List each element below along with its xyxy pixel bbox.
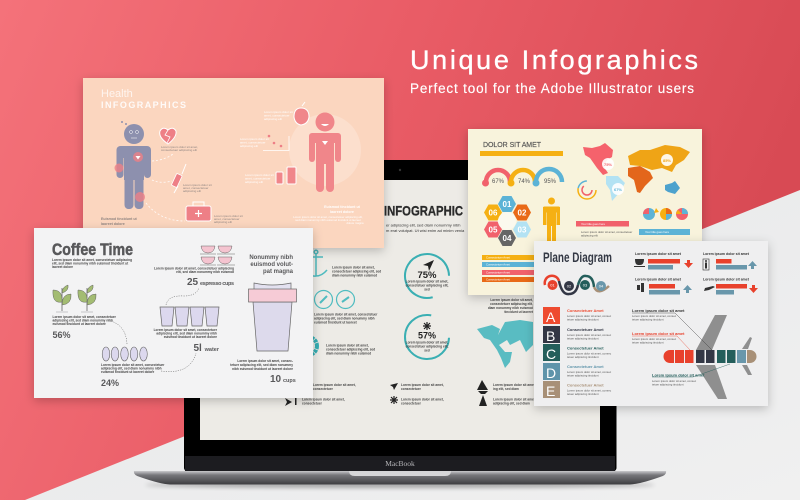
map caption text: adipiscing elit <box>581 234 598 238</box>
laptop bezel <box>184 160 616 471</box>
list text: Lorem ipsum dolor sit amet, consec <box>567 352 612 356</box>
cup text: Lorem ipsum dolor sit amet, consec- <box>237 359 293 363</box>
water text <box>154 328 218 339</box>
icon: drinks <box>276 167 296 184</box>
compass text: Lorem ipsum dolor sit amet, consectetuer <box>314 312 378 316</box>
laptop screen infographic <box>200 180 600 440</box>
camera <box>399 169 401 171</box>
healthy captions: Lorem ipsum dolor sit <box>264 110 293 114</box>
yellow card <box>468 129 702 295</box>
healthy captions: amet, consectetuer <box>264 114 290 118</box>
stat: 10 cups <box>270 374 296 385</box>
healthy summary: Lorem ipsum dolor sit amet, consectetuer adipiscing elit, <box>293 215 363 219</box>
sick captions: adipiscing elit <box>183 189 201 193</box>
gauge 57%: Lorem ipsum dolor sit amet, <box>406 340 448 344</box>
plane leader lines <box>632 313 730 377</box>
lower captions: Lorem ipsum dolor sit amet, <box>313 383 356 387</box>
lower captions: consectetuer <box>313 387 334 391</box>
gauge 57%: sed <box>424 348 430 352</box>
plane callouts: Lorem ipsum dolor sit amet, consec <box>632 337 677 341</box>
hexagon cycle <box>484 196 531 246</box>
anchor text: Lorem ipsum dolor sit amet, <box>332 266 375 270</box>
plane callouts: tetuer adipiscing tincidunt <box>652 382 684 386</box>
halo <box>289 114 361 186</box>
plant text: euismod tincidunt ut laoreet dolore <box>52 322 106 326</box>
eurasia <box>628 145 690 172</box>
plane callouts: Lorem ipsum dolor sit amet, consec <box>632 314 677 318</box>
icon: chart <box>263 135 289 150</box>
coloured list bars: Consectetuer Amet <box>486 262 510 266</box>
panel: plane diagram <box>534 241 768 406</box>
right column text: diam nonummy nibh euismod <box>488 306 533 310</box>
pie charts <box>643 208 688 220</box>
icons row: plane, star, ships <box>285 380 488 406</box>
healthy captions: adipiscing elit <box>240 144 258 148</box>
right column text: consectetuer adipiscing elit, <box>490 302 533 306</box>
letter list: A <box>546 309 556 325</box>
coffee intro <box>52 258 132 269</box>
letter list: D <box>546 365 556 381</box>
plane card <box>534 241 768 406</box>
dashed connectors <box>146 154 185 221</box>
coffee card <box>34 228 313 398</box>
screen intro text: er adipiscing elit, sed diam nonummy nibh <box>386 222 460 228</box>
bezel chin <box>185 456 615 471</box>
large cup heading: pat magna <box>263 269 294 275</box>
heading bar <box>480 151 563 156</box>
espresso text <box>154 266 234 274</box>
coloured list bars: Consectetuer Amet <box>486 256 510 260</box>
right column text: tincidunt ut laoreet <box>504 310 534 314</box>
healthy captions: adipiscing elit <box>245 180 263 184</box>
wave steps <box>545 276 609 294</box>
list text: Lorem ipsum dolor sit amet, consec <box>567 314 612 318</box>
lower captions: Lorem ipsum dolor sit amet, <box>401 383 444 387</box>
healthy summary: Euismod tincidunt ut <box>324 205 361 209</box>
plane callouts: Lorem ipsum dolor sit amet, consec <box>652 379 697 383</box>
coloured list bars: Consectetuer Amet <box>486 270 510 274</box>
africa <box>628 166 653 193</box>
plane callouts: Lorem ipsum dolor sit amet <box>632 308 685 313</box>
icon: espresso cups <box>200 246 235 265</box>
plane callouts: tetuer adipiscing tincidunt <box>632 318 664 322</box>
letter list <box>543 307 560 399</box>
icon: beans <box>102 347 147 361</box>
healthy summary: dolore magna <box>346 221 364 225</box>
list text: tetuer adipiscing tincidunt <box>567 374 599 378</box>
ring text <box>326 344 375 356</box>
north america <box>583 143 613 175</box>
right column text: Lorem ipsum dolor sit amet, <box>490 298 533 302</box>
arc percentages <box>486 169 562 182</box>
water text: Lorem ipsum dolor sit amet, consectetuer <box>154 328 218 332</box>
lower captions: Lorem ipsum dolor sit amet, <box>493 383 536 387</box>
dotted arrows <box>111 288 199 372</box>
wave steps: 03 <box>583 282 588 288</box>
healthy summary: sed diam nonummy nibh euismod tincidunt ut laoreet <box>295 218 361 222</box>
MacBook label: MacBook <box>385 459 415 468</box>
healthy captions: amet, consectetuer <box>240 140 266 144</box>
sick captions: Lorem ipsum dolor sit <box>183 183 212 187</box>
wave steps: 04 <box>599 284 604 288</box>
plane callouts: Lorem ipsum dolor sit amet <box>632 331 685 336</box>
letter list: C <box>546 346 556 362</box>
gauge 75%: sed <box>424 288 430 292</box>
donut chart <box>578 181 596 199</box>
panel: dolor sit amet <box>468 129 702 295</box>
sick figure <box>114 121 151 209</box>
hexagon cycle: 04 <box>503 234 512 243</box>
sick captions: consectetuer adipiscing elit <box>161 148 197 152</box>
map caption bars: Your title goes here <box>645 230 669 234</box>
hexagon cycle: 03 <box>518 226 527 234</box>
screen intro text: m erat volutpat. Ut wisi enim ad minim venia <box>386 228 465 233</box>
list text: tetuer adipiscing tincidunt <box>567 355 599 359</box>
screen intro text <box>386 222 465 233</box>
plane callouts: tetuer adipiscing tincidunt <box>632 340 664 344</box>
large cup heading: euismod volut- <box>250 262 293 268</box>
stat: 10 cups: cups <box>283 378 296 384</box>
icon: anchor <box>304 250 327 276</box>
stat: 5l water: 5l water <box>194 343 220 354</box>
icon: water glasses <box>160 307 219 326</box>
anchor text: diam nonummy nibh euismod <box>332 274 377 278</box>
title: Unique Infographics <box>410 45 698 75</box>
large cup heading <box>249 255 294 275</box>
list text: tetuer adipiscing tincidunt <box>567 318 599 322</box>
hexagon cycle: 01 <box>503 200 512 209</box>
ring text: consectetuer adipiscing elit, sed <box>326 348 375 352</box>
person figure <box>543 198 560 242</box>
gauge 57%: consectetuer adipiscing elit, <box>406 344 449 348</box>
bean text: euismod tincidunt ut laoreet dolore <box>101 370 155 374</box>
australia <box>665 181 680 194</box>
icon: first aid kit <box>186 202 211 221</box>
health heading: INFOGRAPHICS <box>101 100 186 110</box>
plant text <box>52 315 117 326</box>
lower captions: consectetuer <box>401 387 422 391</box>
panel: health infographics <box>83 78 384 248</box>
coffee intro: elit, sed diam nonummy nibh euismod tincidunt ut <box>52 262 129 266</box>
coloured list bars: Consectetuer Amet <box>486 278 510 282</box>
healthy summary <box>293 205 364 225</box>
anchor text <box>332 266 381 278</box>
hexagon cycle: 02 <box>518 208 527 218</box>
south america <box>606 176 625 201</box>
list text: Consectetuer Amet <box>567 382 604 388</box>
gauge 75%: 75% <box>417 270 437 281</box>
list text: tetuer adipiscing tincidunt <box>567 336 599 340</box>
list text: Lorem ipsum dolor sit amet, consec <box>567 370 612 374</box>
arc badges <box>482 180 540 186</box>
wave steps: 01 <box>550 282 555 288</box>
icon: syringe <box>171 164 186 193</box>
plant text: Lorem ipsum dolor sit amet, consectetuer <box>52 315 117 319</box>
anchor text: consectetuer adipiscing elit, sed <box>332 270 381 274</box>
stat rows: Lorem ipsum dolor sit amet <box>635 278 682 282</box>
coffee intro: laoreet dolore <box>52 265 73 269</box>
screen background <box>200 180 600 440</box>
map percentage bubbles: 75% <box>604 162 612 167</box>
stat: 25 espresso cups: 25 <box>187 277 199 288</box>
sick captions: Lorem ipsum dolor sit <box>214 214 243 218</box>
stat rows <box>635 252 750 282</box>
healthy captions: adipiscing elit <box>264 117 282 121</box>
list text: tetuer adipiscing tincidunt <box>567 392 599 396</box>
stat rows: Lorem ipsum dolor sit amet <box>703 252 750 256</box>
plane callouts <box>632 308 705 386</box>
stat: 24%: 24% <box>101 378 119 388</box>
icon: apple <box>294 102 309 125</box>
gauge 57% <box>404 314 450 360</box>
cup text: nibh euismod tincidunt ut laoreet dolore <box>232 367 293 371</box>
lower captions <box>302 383 536 406</box>
icon: plants <box>53 285 96 312</box>
world map <box>477 320 533 368</box>
arc labels <box>492 179 557 185</box>
hexagon cycle: 06 <box>489 208 498 218</box>
icon: takeaway cup <box>248 283 296 351</box>
healthy captions: amet, consectetuer <box>245 176 271 180</box>
cup text <box>230 359 293 371</box>
list text: Lorem ipsum dolor sit amet, consec <box>567 333 612 337</box>
sick captions <box>101 145 243 226</box>
sick captions: amet, consectetuer <box>214 217 240 221</box>
lower captions: Lorem ipsum dolor sit amet, <box>302 398 345 402</box>
icon: broken heart <box>160 128 176 144</box>
water text: adipiscing elit, sed diam nonummy nibh <box>156 332 217 336</box>
subtitle: Perfect tool for the Adobe Illustrator users <box>410 81 694 96</box>
arc labels: 67% <box>492 179 505 185</box>
laptop base <box>134 471 666 484</box>
map percentage bubbles <box>602 154 673 195</box>
stat: 56%: 56% <box>52 330 71 340</box>
list text: Consectetuer Amet <box>567 308 604 313</box>
bean text <box>101 363 165 374</box>
plane wings and tail <box>696 315 752 399</box>
stat icons <box>634 259 715 292</box>
sick captions: laoreet dolore <box>101 222 125 226</box>
stat: 25 espresso cups: espresso cups <box>200 281 234 287</box>
compass text <box>314 312 378 324</box>
letter list: E <box>546 383 555 399</box>
compass text: adipiscing elit, sed diam nonummy nibh <box>314 316 375 320</box>
list text: Consectetuer Amet <box>567 327 604 332</box>
arc labels: 95% <box>544 179 557 185</box>
health heading <box>101 88 186 110</box>
espresso text: elit, sed diam nonummy nibh euismod <box>176 270 234 274</box>
list text <box>567 308 612 396</box>
laptop <box>134 160 666 488</box>
map percentage bubbles: 67% <box>614 187 622 192</box>
cup text: tetuer adipiscing elit, sed diam nonummy <box>230 363 293 367</box>
lower captions: Lorem ipsum dolor sit amet, <box>493 398 536 402</box>
bean text: Lorem ipsum dolor sit amet, consectetuer <box>101 363 165 367</box>
healthy figure <box>309 112 341 192</box>
hexagon cycle: 05 <box>489 226 498 234</box>
ring text: diam nonummy nibh euismod <box>326 352 371 356</box>
water text: euismod tincidunt ut laoreet dolore <box>164 335 217 339</box>
icon: teal ring <box>299 337 317 355</box>
list text: Lorem ipsum dolor sit amet, consec <box>567 388 612 392</box>
stat rows: Lorem ipsum dolor sit amet <box>703 278 750 282</box>
gauge 75%: consectetuer adipiscing elit, <box>406 284 449 288</box>
bean text: adipiscing elit, sed diam nonummy nibh <box>101 366 162 370</box>
map caption text <box>581 230 632 238</box>
coffee heading: Coffee Time <box>52 240 133 259</box>
coloured list bars <box>482 255 542 282</box>
lower captions: consectetuer <box>401 402 422 406</box>
health card <box>83 78 384 248</box>
lower captions: ing elit, sed diam <box>493 387 519 391</box>
map caption bars: Your title goes here <box>581 222 605 226</box>
large cup heading: Nonummy nibh <box>249 255 293 261</box>
lower captions: adipiscing elit, sed diam <box>493 402 530 406</box>
lower captions: Lorem ipsum dolor sit amet, <box>401 398 444 402</box>
coffee intro: Lorem ipsum dolor sit amet, consectetuer adipiscing <box>52 258 132 262</box>
wave steps: 02 <box>567 284 572 288</box>
stat rows: Lorem ipsum dolor sit amet <box>635 252 682 256</box>
list text: Consectetuer Amet <box>567 364 604 369</box>
stat bars <box>648 259 747 294</box>
plant text: adipiscing elit, sed diam nonummy nibh <box>52 318 113 322</box>
map caption bars <box>576 221 690 235</box>
stat: 25 espresso cups <box>187 277 234 288</box>
plane fuselage <box>664 350 757 363</box>
list text: Consectetuer Amet <box>567 346 604 350</box>
gauge 75% <box>400 249 454 303</box>
panel: coffee time <box>34 228 313 398</box>
sick captions: adipiscing elit <box>214 220 232 224</box>
lower captions: consectetuer <box>302 402 323 406</box>
sick captions: Euismod tincidunt ut <box>101 217 138 221</box>
base notch <box>349 471 451 476</box>
gauge 75%: Lorem ipsum dolor sit amet, <box>406 280 448 284</box>
icon: compasses <box>314 290 354 308</box>
stat: 10 cups: 10 <box>270 374 282 385</box>
right column text <box>488 298 534 314</box>
ring text: Lorem ipsum dolor sit amet, <box>326 344 369 348</box>
healthy captions: Lorem ipsum dolor sit <box>240 137 269 141</box>
health heading: Health <box>101 88 133 100</box>
map caption text: Lorem ipsum dolor sit amet, consectetuer <box>581 230 632 234</box>
plane callouts: Lorem ipsum dolor sit amet <box>652 372 705 378</box>
compass text: euismod tincidunt ut laoreet <box>314 320 358 324</box>
arc labels: 74% <box>518 179 531 185</box>
healthy summary: laoreet dolore <box>330 210 354 214</box>
letter list: B <box>546 328 555 344</box>
healthy captions: Lorem ipsum dolor sit <box>245 173 274 177</box>
plane heading: Plane Diagram <box>543 249 612 265</box>
map percentage bubbles: 85% <box>663 158 671 163</box>
yellow heading: DOLOR SIT AMET <box>483 142 542 149</box>
gauge 57%: 57% <box>418 330 436 340</box>
healthy captions <box>240 110 293 184</box>
laptop shadow <box>145 482 655 488</box>
sick captions: Lorem ipsum dolor sit amet, <box>161 145 198 149</box>
sick captions: amet, consectetuer <box>183 186 209 190</box>
screen heading: INFOGRAPHIC <box>384 204 463 218</box>
espresso text: Lorem ipsum dolor sit amet, consectetuer adipiscing <box>154 266 234 270</box>
stat arrows <box>683 260 758 293</box>
